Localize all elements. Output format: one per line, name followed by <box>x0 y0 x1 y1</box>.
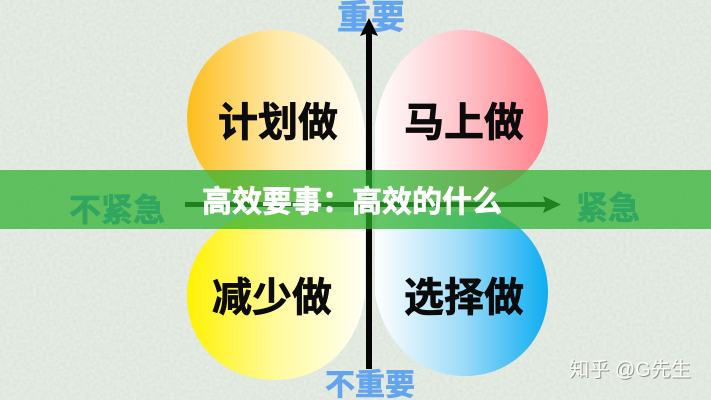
vertical axis arrow <box>360 18 378 369</box>
label: choose to do: 选择做 <box>404 276 524 320</box>
green title band <box>0 170 711 229</box>
label: plan to do: 计划做 <box>218 101 338 145</box>
label: not urgent: 不紧急 <box>69 192 165 228</box>
watermark: 知乎 @G先生 <box>570 359 692 382</box>
title: 高效要事：高效的什么 <box>202 186 502 219</box>
label: urgent: 紧急 <box>576 190 640 226</box>
petal: do less <box>187 212 365 380</box>
label: important: 重要 <box>337 0 405 37</box>
label: do less: 减少做 <box>212 276 332 320</box>
watermark: 知乎 @G先生 <box>569 358 691 381</box>
petal: do now <box>375 30 548 207</box>
petal: choose to do <box>375 212 548 376</box>
label: do now: 马上做 <box>404 101 524 145</box>
petal: plan to do <box>187 30 365 206</box>
horizontal axis arrow <box>185 196 561 213</box>
